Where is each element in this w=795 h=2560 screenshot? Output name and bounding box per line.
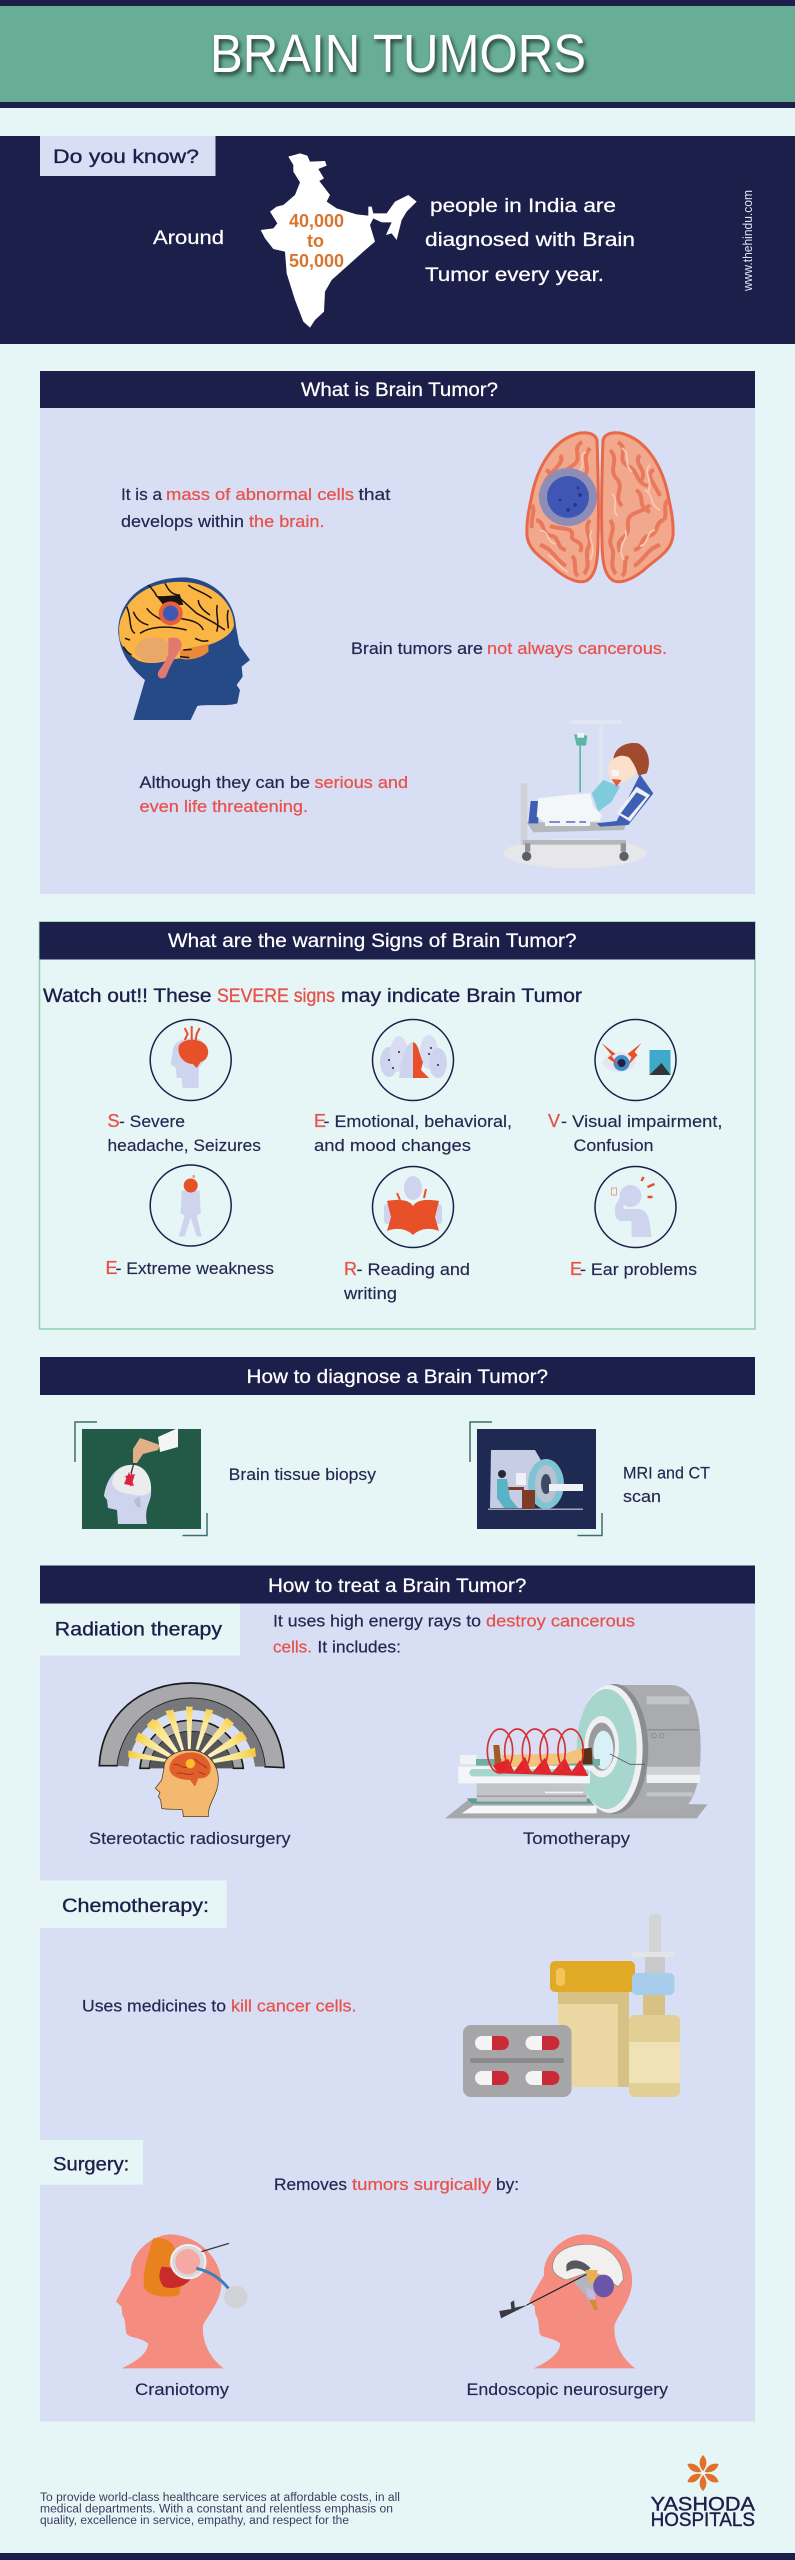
logo: yashoda hospitals [651, 2455, 755, 2531]
footer text: quality, excellence in service, empathy, and respect for the [40, 2515, 349, 2527]
footer text: To provide world-class healthcare services at affordable costs, in all [40, 2492, 400, 2504]
text: mass: develops within [121, 512, 244, 531]
section: chemotherapy [40, 1880, 227, 1928]
text: serious [140, 773, 408, 816]
label: reading and writing: writing [343, 1285, 397, 1303]
icon: severe headache [150, 1020, 231, 1100]
footer text: medical departments. With a constant and relentless emphasis on [40, 2504, 393, 2516]
text: people diagnosed: diagnosed with Brain [425, 230, 635, 251]
label: emotional changes [314, 1111, 512, 1155]
label: reading and writing: - Reading and [356, 1261, 470, 1279]
icon: flower [686, 2455, 720, 2491]
label: visual impairment: - Visual impairment, [561, 1113, 722, 1131]
text: mass: the brain. [249, 512, 324, 531]
subheading: watch out: may indicate Brain Tumor [341, 986, 583, 1007]
icon: mri and ct [470, 1422, 602, 1536]
subheading: watch out: Watch out!! These [43, 986, 212, 1007]
label: tomotherapy: Tomotherapy [523, 1830, 631, 1848]
icon: medicines [463, 1914, 680, 2097]
heading: How to treat a Brain Tumor? [268, 1576, 526, 1597]
text: mass: that [358, 485, 391, 504]
label: extreme weakness: - Extreme weakness [116, 1260, 274, 1278]
statistic: 50,000 [289, 251, 344, 271]
panel: do you know [0, 136, 795, 344]
section: radiation therapy: Radiation therapy [55, 1620, 223, 1640]
subheading: watch out: SEVERE signs [217, 986, 335, 1007]
text: mass [121, 485, 391, 531]
text: radiation description: cells. [273, 1638, 312, 1657]
icon: india map [261, 153, 417, 328]
icon: visual impairment [595, 1020, 676, 1100]
statistic: 40,000 [289, 211, 344, 231]
label: ear problems: - Ear problems [580, 1261, 697, 1279]
text: chemotherapy description [82, 1997, 356, 2016]
logo: yashoda hospitals: HOSPITALS [651, 2510, 755, 2531]
label: visual impairment [548, 1111, 722, 1155]
icon: stereotactic radiosurgery [99, 1683, 284, 1817]
text: surgery description: tumors surgically [352, 2175, 492, 2194]
label: reading and writing [343, 1259, 470, 1303]
label: severe headache: - Severe [119, 1113, 185, 1131]
text: not always cancerous: Brain tumors are [351, 639, 483, 658]
icon: patient in bed [503, 720, 653, 868]
icon: extreme weakness [150, 1165, 231, 1246]
label: visual impairment: Confusion [574, 1137, 654, 1155]
icon: head with brain [118, 577, 250, 720]
label: extreme weakness: E [106, 1258, 118, 1278]
text: chemotherapy description: Uses medicines to [82, 1997, 226, 2016]
icon: brain top view with tumor [527, 433, 673, 582]
icon: endoscopic neurosurgery [499, 2234, 635, 2368]
text: people diagnosed: Tumor every year. [425, 265, 604, 286]
title banner [0, 0, 795, 108]
icon: ear problems [595, 1166, 676, 1248]
label: emotional changes: - Emotional, behavioral, [324, 1113, 512, 1131]
section: chemotherapy: Chemotherapy: [62, 1896, 209, 1917]
label: biopsy: Brain tissue biopsy [229, 1466, 377, 1484]
text: mass: It is a [121, 485, 163, 504]
heading: What are the warning Signs of Brain Tumor? [168, 931, 576, 952]
text: radiation description: It uses high energy rays to [273, 1612, 481, 1630]
text: mass: mass of abnormal cells [166, 485, 354, 504]
section: radiation therapy [40, 1604, 240, 1656]
panel: how to treat [40, 1566, 755, 2422]
label: mri and ct: scan [623, 1488, 661, 1506]
text: serious: serious and [314, 773, 408, 792]
panel: what is brain tumor [40, 371, 755, 894]
icon: biopsy [75, 1422, 207, 1536]
statistic [289, 211, 344, 271]
section: surgery [40, 2140, 143, 2185]
heading: do you know: Do you know? [53, 147, 199, 168]
footer text [40, 2492, 400, 2527]
label: craniotomy: Craniotomy [135, 2381, 230, 2399]
text: around: Around [153, 228, 224, 249]
label: severe headache [108, 1111, 261, 1155]
source: www.thehindu.com [741, 190, 755, 292]
text: people diagnosed: people in India are [430, 196, 616, 217]
icon: emotional changes [372, 1020, 454, 1100]
subheading: watch out [43, 986, 583, 1007]
text: surgery description: by: [496, 2175, 519, 2194]
text: serious: Although they can be [140, 773, 310, 792]
label: visual impairment: V [548, 1111, 560, 1131]
label: mri and ct [623, 1464, 710, 1506]
text: radiation description: destroy cancerous [486, 1612, 635, 1630]
icon: craniotomy [116, 2234, 248, 2368]
text: radiation description: It includes: [317, 1638, 401, 1657]
section: surgery: Surgery: [53, 2155, 129, 2176]
label: reading and writing: R [344, 1259, 357, 1279]
text: not always cancerous: not always cancerous. [487, 639, 667, 658]
label: severe headache: headache, Seizures [108, 1137, 261, 1155]
label: ear problems: E [570, 1259, 582, 1279]
text: chemotherapy description: kill cancer cells. [231, 1997, 356, 2016]
label: emotional changes: E [314, 1111, 326, 1131]
label: mri and ct: MRI and CT [623, 1464, 710, 1482]
text: surgery description [274, 2175, 519, 2194]
panel: how to diagnose [40, 1357, 755, 1536]
heading: What is Brain Tumor? [301, 380, 498, 401]
label: endoscopic neurosurgery: Endoscopic neurosurgery [466, 2381, 669, 2399]
logo: yashoda hospitals: YASHODA [651, 2494, 755, 2515]
statistic: to [307, 231, 324, 251]
title: BRAIN TUMORS [210, 24, 586, 84]
label: severe headache: S [108, 1111, 120, 1131]
text: not always cancerous [351, 639, 667, 658]
icon: tomotherapy [445, 1684, 708, 1818]
text: radiation description [273, 1612, 635, 1657]
label: stereotactic radiosurgery: Stereotactic radiosurgery [89, 1830, 291, 1848]
label: emotional changes: and mood changes [314, 1137, 471, 1155]
text: surgery description: Removes [274, 2175, 347, 2194]
text: people diagnosed [425, 196, 635, 286]
panel: warning signs [40, 922, 755, 1329]
icon: reading and writing [372, 1166, 454, 1248]
heading: How to diagnose a Brain Tumor? [246, 1367, 548, 1388]
text: serious: even life threatening. [140, 797, 308, 816]
